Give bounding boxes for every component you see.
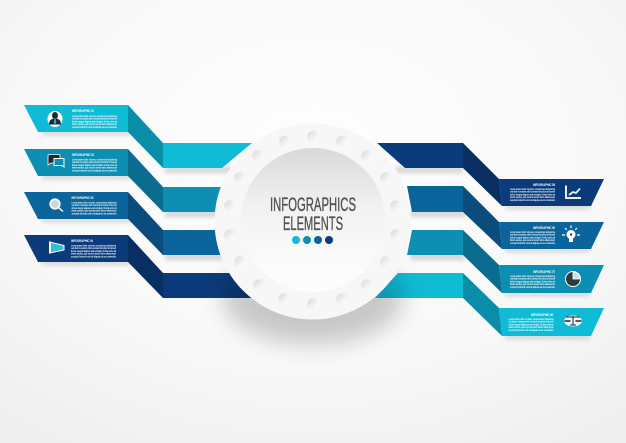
icon: speech bubbles <box>48 154 64 167</box>
text: infographic 07 <box>510 270 555 289</box>
ribbon 03 <box>24 192 230 255</box>
text: infographic 04: Lorem ipsum dolor sit amet, consectetuer adipiscing <box>71 244 116 248</box>
text: infographic 07: sed diam nonummy nibh euismod tincidunt ut laoreet <box>510 277 555 281</box>
text: infographic 04: suscipit lobortis nisl ut aliquip ex ea commodo <box>71 254 116 258</box>
text: infographic 07: minim veniam, quis nostrud exerci tation ullamcorper <box>510 282 555 286</box>
text: infographic 01 <box>72 109 117 129</box>
text: infographic 06: sed diam nonummy nibh euismod tincidunt ut laoreet <box>510 233 555 237</box>
ribbon 05 <box>377 143 604 206</box>
text: infographic 07: INFOGRAPHIC 07 <box>533 270 555 274</box>
ribbon 04 <box>24 235 255 298</box>
text: infographic 06 <box>510 226 555 245</box>
text: infographic 08: sed diam nonummy nibh euismod tincidunt ut laoreet <box>508 320 554 324</box>
text: infographic 05: minim veniam, quis nostrud exerci tation ullamcorper <box>510 195 555 199</box>
text: infographic 08: Lorem ipsum dolor sit amet, consectetuer adipiscing <box>508 317 554 321</box>
text: infographic 03: sed diam nonummy nibh euismod tincidunt ut laoreet <box>72 203 116 207</box>
text: infographic 02: dolore magna aliquam erat volutpat. Ut wisi enim ad <box>72 163 117 167</box>
text: infographic 04: INFOGRAPHIC 04 <box>71 239 94 243</box>
icon: pie chart <box>566 272 580 286</box>
circle shadow <box>223 252 403 344</box>
text: infographic 03: dolore magna aliquam erat volutpat. Ut wisi enim ad <box>72 206 117 210</box>
text: infographic 03: INFOGRAPHIC 03 <box>72 196 94 200</box>
text: infographic 03: suscipit lobortis nisl ut aliquip ex ea commodo <box>72 211 117 215</box>
text: infographic 05: sed diam nonummy nibh euismod tincidunt ut laoreet <box>510 190 555 194</box>
soft shadows <box>42 131 590 339</box>
text: infographic 06: dolore magna aliquam erat volutpat. Ut wisi enim ad <box>510 235 555 239</box>
icon: magnifier <box>50 199 63 212</box>
text: infographic 08 <box>508 313 554 332</box>
icon: megaphone <box>49 242 64 254</box>
icon: person <box>48 111 62 127</box>
text: infographic 04: dolore magna aliquam erat volutpat. Ut wisi enim ad <box>71 249 116 253</box>
text: infographic 02 <box>72 153 117 172</box>
text: infographic 02: INFOGRAPHIC 02 <box>72 153 94 157</box>
text: infographic 04: minim veniam, quis nostrud exerci tation ullamcorper <box>71 252 116 256</box>
text: infographic 07: Lorem ipsum dolor sit amet, consectetuer adipiscing <box>510 274 555 278</box>
ribbon 02 <box>24 149 230 212</box>
colour dots <box>292 236 333 244</box>
ribbon 01 <box>24 105 252 168</box>
text: infographic 01: INFOGRAPHIC 01 <box>72 109 94 113</box>
text: infographic 08: INFOGRAPHIC 08 <box>531 313 553 317</box>
text: infographic 07: suscipit lobortis nisl ut aliquip ex ea commodo <box>510 285 555 289</box>
text: infographic 03: Lorem ipsum dolor sit amet, consectetuer adipiscing <box>72 200 117 204</box>
text: infographic 01: minim veniam, quis nostrud exerci tation ullamcorper <box>72 122 117 126</box>
title: INFOGRAPHICS <box>270 194 356 216</box>
text: infographic 05: Lorem ipsum dolor sit amet, consectetuer adipiscing <box>510 187 555 191</box>
text: infographic 06: INFOGRAPHIC 06 <box>533 226 555 230</box>
text: infographic 02: suscipit lobortis nisl ut aliquip ex ea commodo <box>72 168 117 172</box>
text: infographic 04: sed diam nonummy nibh euismod tincidunt ut laoreet <box>71 246 116 250</box>
text: infographic 05: INFOGRAPHIC 05 <box>533 183 555 187</box>
text: infographic 02: minim veniam, quis nostrud exerci tation ullamcorper <box>72 166 117 170</box>
icon: light bulb <box>562 226 580 242</box>
icon: growth chart <box>566 186 581 198</box>
title <box>270 194 356 235</box>
text: infographic 01: suscipit lobortis nisl ut aliquip ex ea commodo <box>72 125 117 129</box>
text: infographic 08: dolore magna aliquam erat volutpat. Ut wisi enim ad <box>508 322 554 326</box>
icon: scales <box>564 316 582 326</box>
disc holes <box>224 131 402 310</box>
text: infographic 06: minim veniam, quis nostrud exerci tation ullamcorper <box>510 238 555 242</box>
title: ELEMENTS <box>283 213 343 235</box>
central disc <box>214 124 410 320</box>
ribbon 08 <box>375 273 604 336</box>
text: infographic 08: suscipit lobortis nisl ut aliquip ex ea commodo <box>508 328 554 332</box>
text: infographic 06: suscipit lobortis nisl ut aliquip ex ea commodo <box>510 241 555 245</box>
text: infographic 01: sed diam nonummy nibh euismod tincidunt ut laoreet <box>72 117 117 121</box>
text: infographic 03 <box>72 196 117 215</box>
ribbon 07 <box>407 230 604 293</box>
text: infographic 07: dolore magna aliquam erat volutpat. Ut wisi enim ad <box>510 279 555 283</box>
text: infographic 01: Lorem ipsum dolor sit amet, consectetuer adipiscing <box>72 114 117 118</box>
text: infographic 05: suscipit lobortis nisl ut aliquip ex ea commodo <box>510 198 555 202</box>
text: infographic 05 <box>510 183 555 202</box>
text: infographic 02: Lorem ipsum dolor sit amet, consectetuer adipiscing <box>72 158 117 162</box>
ribbon 06 <box>407 186 604 249</box>
text: infographic 01: dolore magna aliquam erat volutpat. Ut wisi enim ad <box>72 119 117 123</box>
text: infographic 05: dolore magna aliquam erat volutpat. Ut wisi enim ad <box>510 192 555 196</box>
text: infographic 08: minim veniam, quis nostrud exerci tation ullamcorper <box>508 325 554 329</box>
text: infographic 02: sed diam nonummy nibh euismod tincidunt ut laoreet <box>72 160 117 164</box>
text: infographic 06: Lorem ipsum dolor sit amet, consectetuer adipiscing <box>510 230 555 234</box>
text: infographic 03: minim veniam, quis nostrud exerci tation ullamcorper <box>72 209 117 213</box>
text: infographic 04 <box>71 239 116 258</box>
